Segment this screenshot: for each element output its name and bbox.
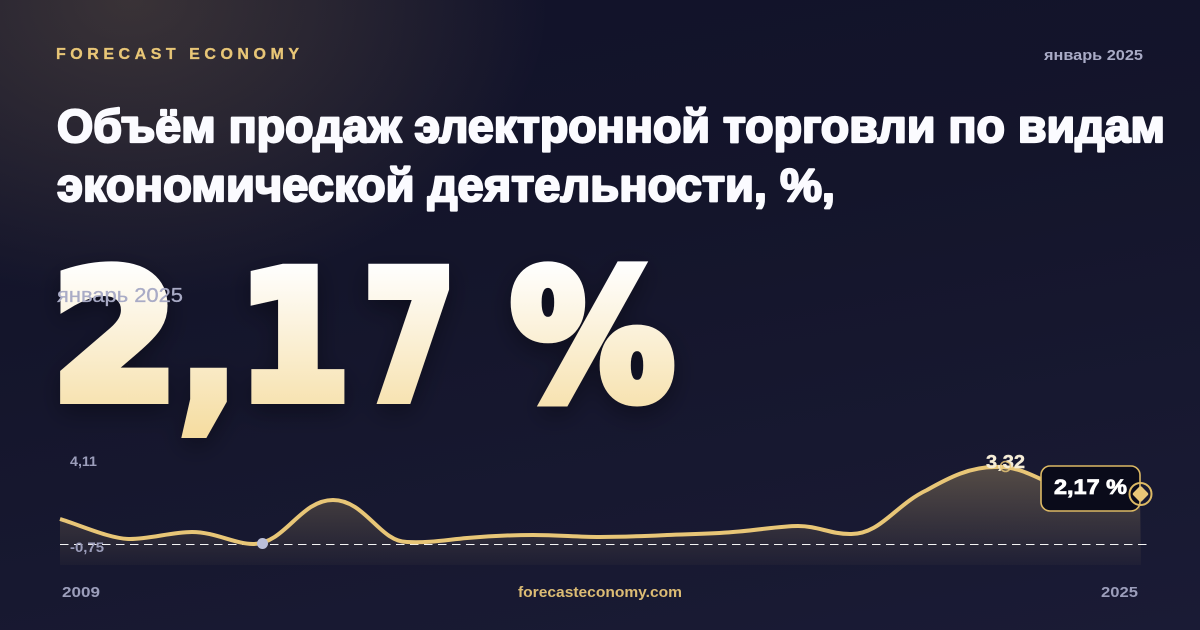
big value: 2: [52, 235, 178, 440]
max value label: 3,32: [986, 452, 1025, 472]
big value: %: [511, 235, 674, 440]
y axis max label: 4,11: [70, 453, 97, 469]
title: Объём продаж электронной торговли по видам: [57, 100, 1165, 152]
big value: 1: [238, 235, 350, 440]
chart area fill: [60, 467, 1141, 565]
title: [57, 100, 1165, 211]
zero reference line: [60, 544, 1147, 546]
maximum marker: [1000, 462, 1010, 472]
big value: [52, 235, 674, 449]
start year: 2009: [62, 584, 100, 601]
date label top right: январь 2025: [1044, 47, 1143, 64]
current value marker: [1130, 483, 1152, 505]
source url: forecasteconomy.com: [518, 584, 682, 601]
minimum marker: [257, 538, 268, 549]
line chart: [60, 452, 1152, 565]
brand label: FORECAST ECONOMY: [56, 46, 299, 63]
value subtitle: январь 2025: [57, 285, 183, 307]
y axis min label: -0,75: [70, 539, 104, 555]
chart line: [60, 467, 1140, 544]
end year: 2025: [1101, 584, 1138, 601]
title: экономической деятельности, %,: [57, 159, 835, 211]
big value: 7: [364, 235, 455, 440]
current value callout: [1041, 466, 1140, 511]
current value callout: 2,17 %: [1054, 476, 1127, 499]
big value: ,: [180, 244, 237, 449]
